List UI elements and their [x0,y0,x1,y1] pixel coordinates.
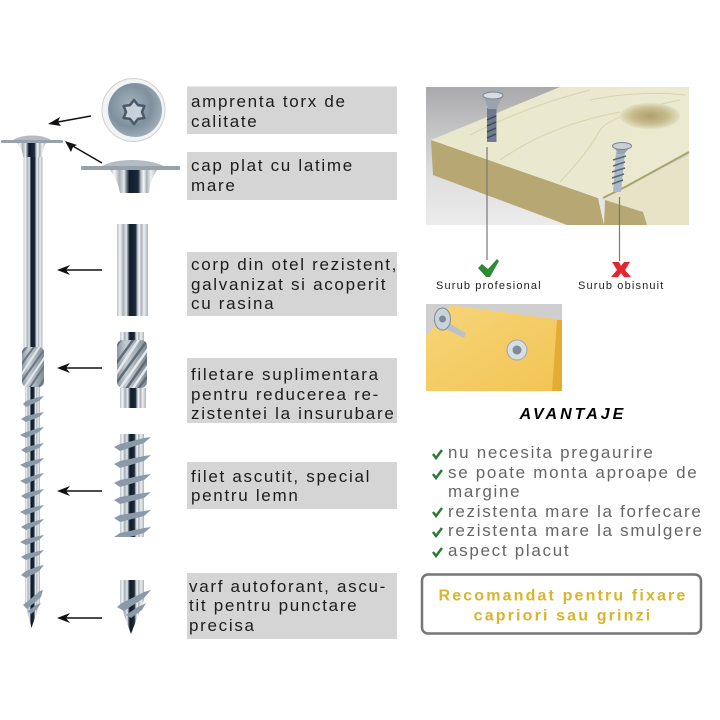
label: sharp thread: pentru lemn [191,486,299,505]
detail: drill tip [117,580,151,634]
wood front face [431,140,604,225]
callout: recommendation: Recomandat pentru fixare [439,588,687,604]
caption: ordinary: Surub obisnuit [578,280,664,292]
full screw [1,136,63,628]
label: extra thread: filetare suplimentara [191,365,380,384]
arrow: torx to head [48,116,91,126]
screw threaded body [20,387,44,628]
label: body: corp din otel rezistent, [191,255,398,274]
item 1: nu necesita pregaurire [448,443,655,462]
wood knot [620,103,680,129]
item 2: margine [448,482,521,501]
pointer line: professional [486,147,488,260]
item 3: rezistenta mare la forfecare [448,502,703,521]
professional screw [483,92,503,142]
list: advantages [433,443,704,560]
callout: recommendation [422,574,701,634]
item 2 [433,463,698,501]
label: body: cu rasina [191,294,275,313]
arrow: shaft [57,265,102,275]
item 2: se poate monta aproape de [448,463,698,482]
label: flat head [187,152,397,200]
detail: shaft [117,224,148,316]
label: extra thread: zistentei la insurubare [191,404,395,423]
arrow: wood thread [57,486,102,496]
ordinary screw [612,142,632,192]
label: tip: tit pentru punctare [189,596,358,615]
detail: spiral thread [117,332,147,408]
right board [603,152,689,225]
label: sharp thread [187,462,397,509]
screw spiral section [22,347,44,387]
icon: green check [478,259,499,277]
pointer line: ordinary [618,197,620,261]
label: extra thread: pentru reducerea re- [191,385,380,404]
label: torx: amprenta torx de [191,92,347,111]
arrows [48,116,102,623]
wood grain [470,90,685,182]
detail: wood thread [114,434,151,537]
arrow: tip [57,613,102,623]
caption: professional: Surub profesional [436,280,542,292]
icon: red x [611,262,631,277]
heading: advantages: AVANTAJE [519,406,626,423]
label: sharp thread: filet ascutit, special [191,467,371,486]
label: torx: calitate [191,112,258,131]
arrow: flat head to head [65,141,102,163]
screw head [1,136,63,157]
label: tip: precisa [189,616,256,635]
callout: recommendation: capriori sau grinzi [474,608,652,624]
arrow: spiral thread [57,363,102,373]
label: body [187,252,398,316]
label: torx [187,86,397,134]
label: extra thread [187,358,397,423]
photo: screws in wood boards [426,87,689,225]
photo: wood block with screws [426,304,562,391]
front screw [507,340,527,360]
screw shaft [24,157,42,348]
detail: flat head [81,160,180,193]
label: flat head: cap plat cu latime [191,156,354,175]
label: flat head: mare [191,176,237,195]
label: tip: varf autoforant, ascu- [189,577,387,596]
wood top surface [431,87,689,198]
item 5: aspect placut [448,541,570,560]
detail: torx recess [102,78,165,142]
angled screw [434,308,466,338]
item 4: rezistenta mare la smulgere [448,521,704,540]
label: body: galvanizat si acoperit [191,275,387,294]
label: tip [187,573,397,639]
